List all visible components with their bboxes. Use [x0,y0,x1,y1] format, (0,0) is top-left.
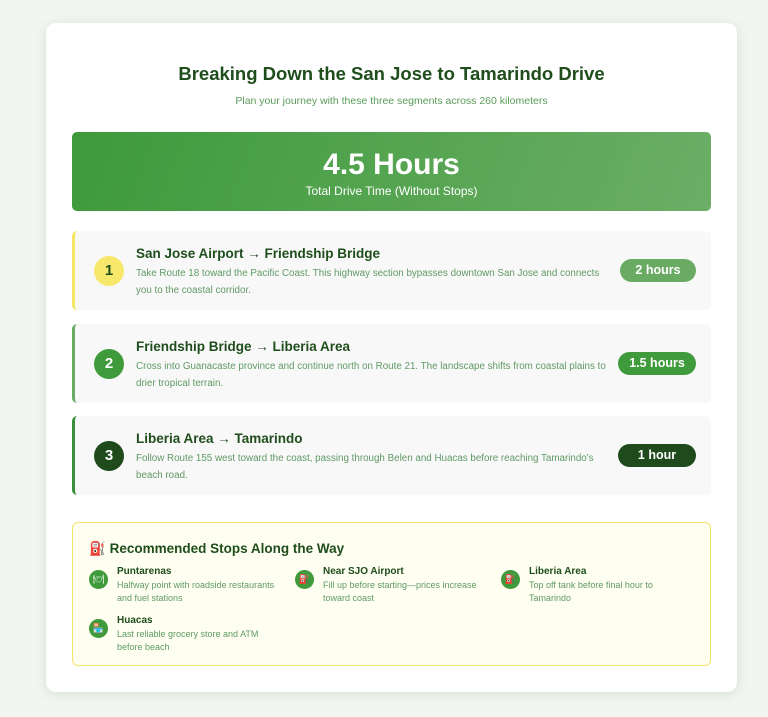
panel: recommended stops: 🏪 [93,623,104,633]
segment 1: 2 hours [635,263,681,277]
banner: total time: 4.5 Hours [323,148,460,181]
banner: total time: Total Drive Time (Without Stops) [305,184,478,198]
title: Breaking Down the San Jose to Tamarindo Drive [178,63,605,84]
panel: recommended stops: ⛽ [299,574,310,584]
segment 1: 1 [105,262,113,279]
segment 2 [72,324,711,403]
segment 3: Follow Route 155 west toward the coast, passing through Belen and Huacas before reaching Tamarindo's beach road. [136,453,594,481]
segment 2: 1.5 hours [629,356,685,370]
panel: recommended stops: 🍽 [93,574,104,584]
segment 3: 3 [105,447,113,464]
subtitle: Plan your journey with these three segments across 260 kilometers [235,95,548,107]
segment 3: Liberia Area → Tamarindo [136,431,303,446]
segment 2: Friendship Bridge → Liberia Area [136,339,350,354]
stops heading: ⛽ Recommended Stops Along the Way [89,541,344,556]
segment 1: Take Route 18 toward the Pacific Coast. This highway section bypasses downtown San Jose and connects you to the coastal corridor. [136,268,599,296]
banner: total time [72,132,711,211]
segment 1: San Jose Airport → Friendship Bridge [136,246,380,261]
segment 1 [72,231,711,310]
stop: Huacas [89,615,258,652]
stop: Liberia Area [501,566,653,603]
segment 2: 2 [105,355,113,372]
segment 2: Cross into Guanacaste province and continue north on Route 21. The landscape shifts from coastal plains to drier tropical terrain. [136,361,606,389]
panel: recommended stops: Fill up before starting—prices increase toward coast [323,580,477,603]
panel: recommended stops: ⛽ [505,574,516,584]
stop: Puntarenas [89,566,274,603]
panel: recommended stops: Liberia Area [529,566,586,577]
panel: recommended stops: Top off tank before final hour to Tamarindo [529,580,653,603]
panel: recommended stops: Last reliable grocery store and ATM before beach [117,629,258,652]
panel: recommended stops: Near SJO Airport [323,566,404,577]
segment 3: 1 hour [638,448,676,462]
panel: recommended stops [72,522,711,666]
panel: recommended stops: Halfway point with roadside restaurants and fuel stations [117,580,274,603]
panel: recommended stops: Huacas [117,615,153,626]
stop: Near SJO Airport [295,566,477,603]
segment 3 [72,416,711,495]
panel: recommended stops: Puntarenas [117,566,171,577]
